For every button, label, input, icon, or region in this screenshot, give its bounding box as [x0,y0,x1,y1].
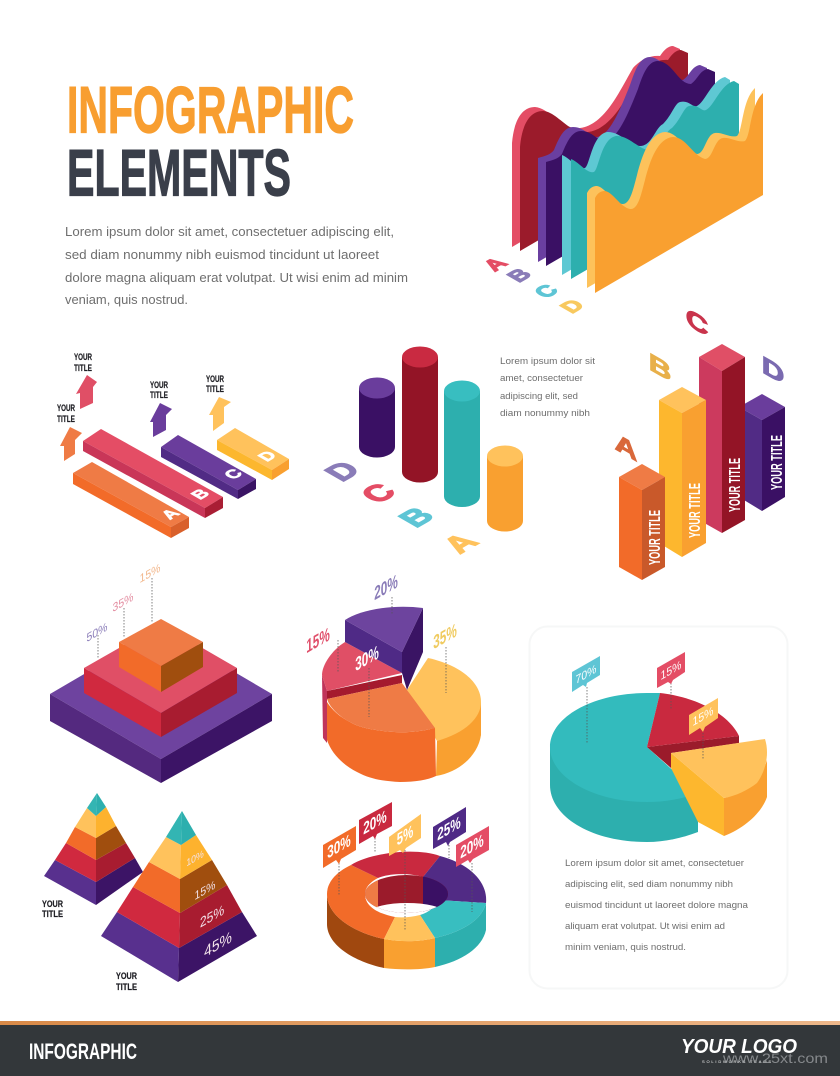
pie labels: 30% [355,642,379,676]
wave letters: A [477,254,513,274]
flag 15% yellow: 15% [693,703,714,729]
arrow labels: YOUR [150,380,168,391]
wave layer A [512,46,688,251]
arrow labels: TITLE [57,414,75,425]
tower C: YOUR TITLE [727,458,744,512]
cylinder orange [487,446,523,532]
donut flag 20% pink: 20% [460,830,484,863]
wave letters: C [528,281,564,301]
step labels [87,560,161,658]
intro text block: veniam, quis nostrud. [65,292,188,307]
card text: adipiscing elit, sed diam nonummy nibh [565,879,733,890]
wave layer C [562,77,739,279]
large pie chart [550,652,767,842]
small pyramid label: YOUR [42,899,63,910]
large pyramid right face [178,811,257,982]
tower A: YOUR TITLE [647,510,664,565]
tower letters [615,303,784,467]
tower letters: D [762,351,784,390]
slice yellow [407,658,481,776]
slice teal [550,693,698,842]
card panel [530,626,788,988]
footer logo: SOLIDWORKS TEAMS [702,1059,771,1064]
small pyramid label: TITLE [42,909,63,920]
step orange [119,619,203,692]
small pyramid right face [96,793,143,905]
tower B: YOUR TITLE [687,483,704,538]
cylinder caption: diam nonummy nibh [500,408,590,419]
flag 15% yellow [689,698,718,735]
cylinder purple [359,378,395,458]
footer title: INFOGRAPHIC [29,1039,137,1064]
title: ELEMENTS [67,136,291,210]
donut flag 5% [389,814,421,856]
footer [0,1021,840,1076]
donut chart [323,802,489,969]
isometric bars with arrows [57,352,289,538]
pie labels: 15% [306,624,330,658]
exploded pie chart [306,571,481,782]
large pyramid label: YOUR [116,971,137,982]
wave layer B [538,57,715,266]
pie labels: 35% [433,620,457,654]
slice yellow [671,739,767,836]
intro text block: Lorem ipsum dolor sit amet, consectetuer adipiscing elit, [65,224,394,239]
bar D [217,428,289,480]
arrow labels: TITLE [206,384,224,395]
tower D [739,394,786,511]
donut flag 20%: 20% [363,806,387,839]
step labels: 15% [140,560,161,586]
cylinder letters: C [353,478,404,508]
donut flag 30%: 30% [327,830,351,863]
arrow labels [57,352,224,425]
stepped pyramid [50,560,272,783]
pie labels [306,571,457,717]
tower A [619,464,665,580]
tower C [699,344,745,533]
card text: Lorem ipsum dolor sit amet, consectetuer [565,858,744,869]
title: INFOGRAPHIC [67,72,354,146]
flag 70%: 70% [576,661,597,687]
arrow yellow [209,397,231,431]
large pyramid left face [101,811,182,982]
small triangular pyramid [42,793,143,920]
slice red [647,693,739,768]
arrow labels: YOUR [206,374,224,385]
wave area chart [477,46,763,316]
donut top segments [327,852,486,941]
tower letters: C [686,303,708,342]
arrow orange [60,427,82,461]
step labels: 35% [113,589,134,615]
cylinder letters: A [435,528,486,558]
card text: euismod tincidunt ut laoreet dolore magna [565,900,749,911]
bar letters: D [254,448,281,464]
tower bar chart [615,303,786,580]
bar letters [157,448,281,522]
large pyramid percentages: 15% [195,877,216,903]
flag 15% red [657,652,685,688]
wave letters: D [554,296,590,316]
bar letters: B [187,486,214,502]
donut hole [365,875,448,913]
intro text block: dolore magna aliquam erat volutpat. Ut wisi enim ad minim [65,270,408,285]
tower B [659,387,706,557]
slice red [322,642,402,743]
large pyramid percentages: 45% [204,928,232,962]
wave letters: B [501,265,537,285]
arrow red [76,375,97,409]
cylinder teal [444,380,480,507]
bar B [83,429,223,518]
step labels: 50% [87,619,108,645]
cylinder letters: B [391,502,442,532]
donut sides [327,894,486,969]
tower letters: A [615,428,637,467]
slice purple [345,607,423,690]
watermark: www.25xt.com [722,1050,828,1066]
large pyramid percentages: 25% [200,901,224,931]
large pyramid label [116,971,137,993]
cylinder red [402,346,438,482]
step red [84,624,237,737]
bar letters: A [157,506,184,522]
small pyramid left face [44,793,97,905]
slice orange [327,683,436,782]
tower D: YOUR TITLE [769,435,786,490]
step purple [50,629,272,783]
large pyramid percentages [186,848,232,962]
arrow labels: TITLE [74,363,92,374]
card text: aliquam erat volutpat. Ut wisi enim ad [565,921,725,932]
large pyramid label: TITLE [116,982,137,993]
footer logo: YOUR LOGO [681,1036,797,1058]
cylinder caption [500,356,595,419]
flag 70% [572,656,600,692]
bar letters: C [220,466,247,482]
cylinder chart [317,346,595,558]
cylinder caption: adipiscing elit, sed [500,391,578,402]
wave layer D [587,88,763,293]
card text [565,858,749,953]
cylinder letters [317,456,486,558]
title [67,72,354,210]
donut flag 25%: 25% [437,812,461,845]
wave letters [477,254,590,316]
arrow purple [150,403,172,437]
tower letters: B [649,348,671,387]
arrow labels: YOUR [74,352,92,363]
cylinder caption: amet, consectetuer [500,373,583,384]
large pyramid percentages: 10% [186,848,204,869]
bar A [73,462,189,538]
bar C [161,435,256,499]
arrow labels: TITLE [150,390,168,401]
card text: minim veniam, quis nostrud. [565,942,686,953]
donut flag 5%: 5% [397,821,413,850]
intro text block [65,224,408,307]
pie labels: 20% [374,571,398,605]
cylinder letters: D [317,456,368,486]
cylinder caption: Lorem ipsum dolor sit [500,356,595,367]
arrow labels: YOUR [57,403,75,414]
large triangular pyramid [101,811,257,993]
intro text block: sed diam nonummy nibh euismod tincidunt ut laoreet [65,247,379,262]
small pyramid label [42,899,63,920]
flag 15% red: 15% [661,657,682,683]
